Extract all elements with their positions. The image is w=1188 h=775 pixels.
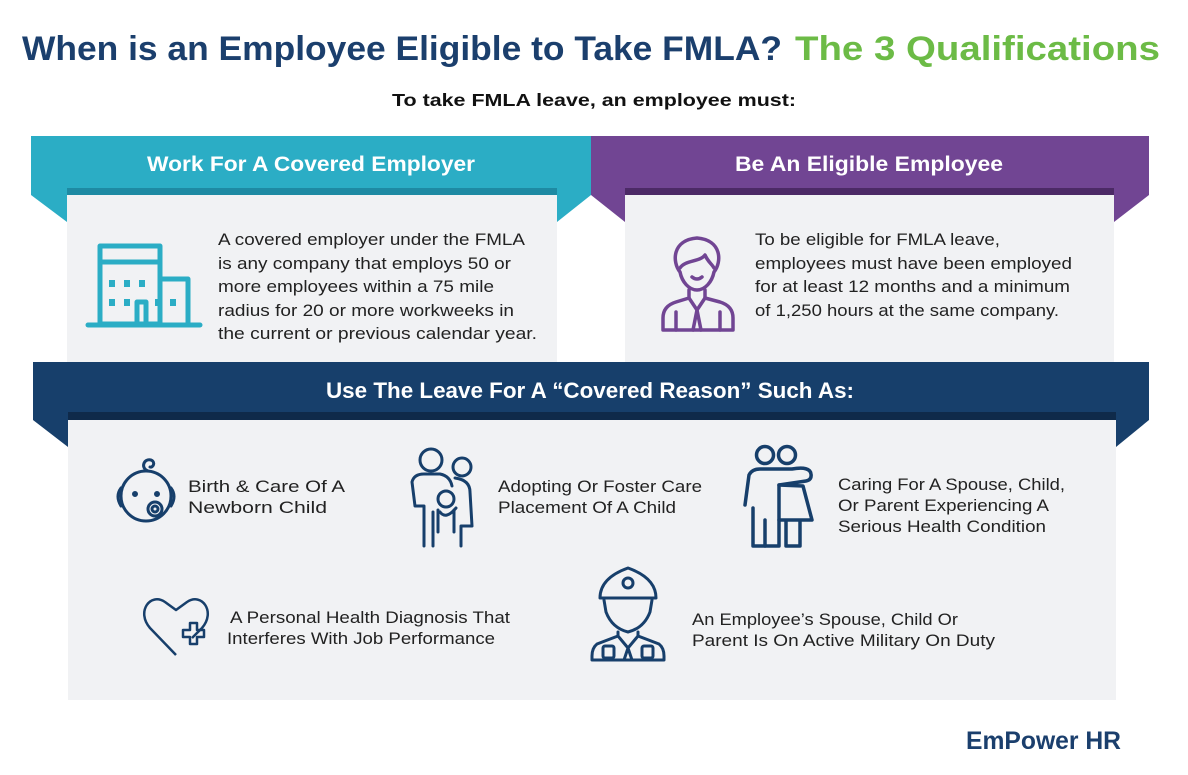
text: adopting: Placement Of A Child — [498, 498, 676, 517]
panel: covered reasons — [33, 362, 1149, 700]
text: eligible employee: employees must have been employed — [755, 254, 1072, 273]
text: eligible employee: To be eligible for FMLA leave, — [755, 230, 1000, 249]
banner: teal — [31, 136, 591, 222]
text: eligible employee: of 1,250 hours at the same company. — [755, 301, 1059, 320]
icon: building — [88, 246, 200, 325]
text: covered employer: the current or previous calendar year. — [218, 324, 537, 343]
text: birth: Newborn Child — [188, 498, 327, 517]
text: personal health — [227, 608, 510, 648]
icon: employee — [663, 238, 733, 330]
subtitle: To take FMLA leave, an employee must: — [392, 90, 796, 110]
text: eligible employee — [755, 230, 1072, 320]
text: caring: Caring For A Spouse, Child, — [838, 475, 1065, 494]
text: covered employer — [218, 230, 537, 343]
text: covered employer: is any company that employs 50 or — [218, 254, 511, 273]
banner: teal: Work For A Covered Employer — [147, 153, 475, 176]
panel: eligible employee — [591, 136, 1149, 362]
banner: navy — [33, 362, 1149, 447]
icon: baby — [118, 460, 174, 521]
text: covered employer: radius for 20 or more workweeks in — [218, 301, 514, 320]
text: personal health: A Personal Health Diagnosis That — [230, 608, 510, 627]
title: When is an Employee Eligible to Take FMLA? — [22, 30, 782, 68]
icon: couple — [745, 446, 812, 546]
banner: navy: Use The Leave For A “Covered Reason” Such As: — [326, 378, 854, 403]
text: birth: Birth & Care Of A — [188, 477, 346, 496]
text: birth — [188, 477, 346, 517]
text: military: An Employee’s Spouse, Child Or — [692, 610, 958, 629]
text: eligible employee: for at least 12 months and a minimum — [755, 277, 1070, 296]
banner: purple: Be An Eligible Employee — [735, 153, 1003, 176]
text: military: Parent Is On Active Military On Duty — [692, 631, 996, 650]
text: caring: Serious Health Condition — [838, 517, 1046, 536]
text: caring: Or Parent Experiencing A — [838, 496, 1050, 515]
text: covered employer: A covered employer under the FMLA — [218, 230, 526, 249]
text: adopting — [498, 477, 702, 517]
text: personal health: Interferes With Job Performance — [227, 629, 495, 648]
panel: covered employer — [31, 136, 591, 362]
icon: heart — [144, 599, 208, 655]
title — [22, 30, 1160, 68]
icon: officer — [592, 568, 664, 660]
text: covered employer: more employees within a 75 mile — [218, 277, 494, 296]
icon: family — [412, 449, 472, 546]
text: military — [692, 610, 996, 650]
logo: EmPower HR — [966, 727, 1121, 755]
text: adopting: Adopting Or Foster Care — [498, 477, 702, 496]
title: The 3 Qualifications — [795, 30, 1160, 68]
banner: purple — [591, 136, 1149, 222]
text: caring — [838, 475, 1065, 536]
